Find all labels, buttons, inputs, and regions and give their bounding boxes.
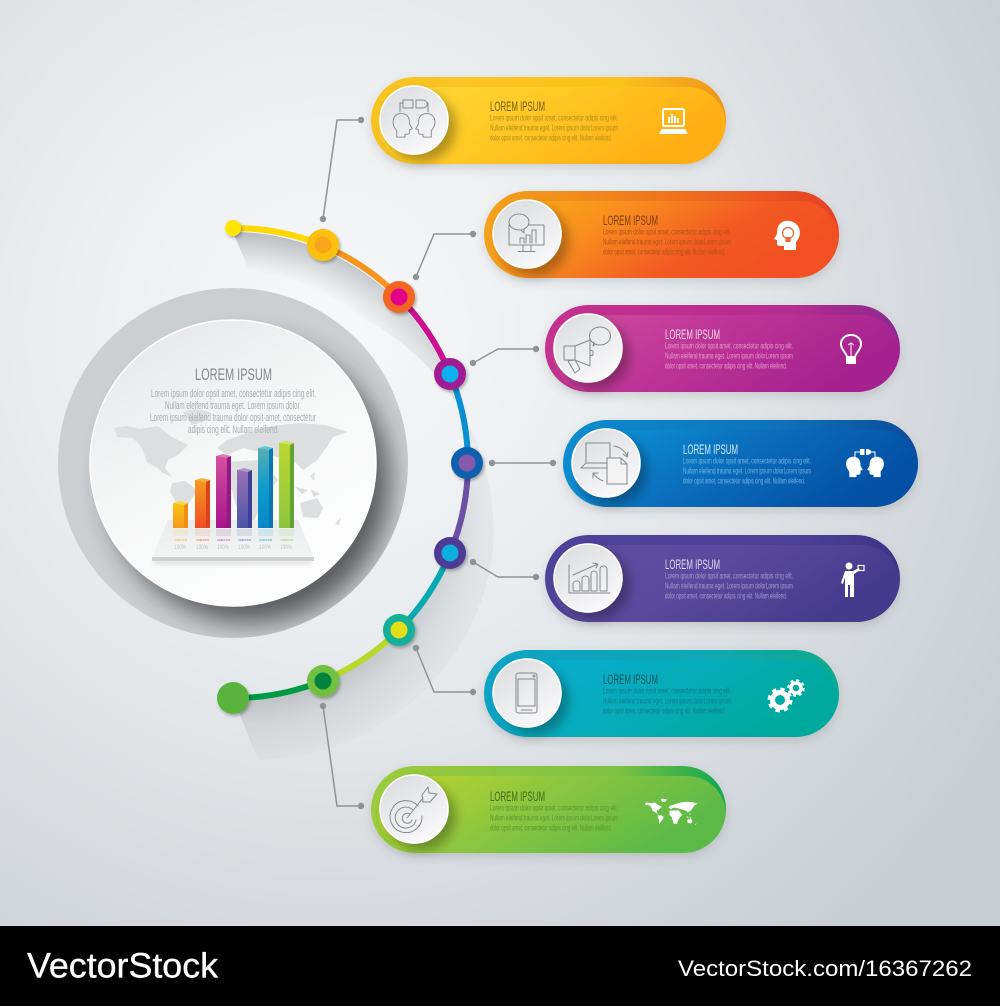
body text: dolor opsit amet, consectetur adipis cing elit. Nullam eleifend. [683, 476, 805, 486]
body text [490, 804, 618, 832]
bar labels: LOREM IPSUM [174, 538, 187, 542]
panel: blue card [563, 420, 918, 507]
panel: purple card [545, 535, 900, 622]
footer bar [0, 926, 1000, 1006]
body text: Lorem ipsum dolor opsit amet, consectetur adipis cing elit. [603, 686, 731, 696]
body text [665, 342, 793, 370]
heading: LOREM IPSUM [490, 788, 545, 804]
timeline arc [217, 220, 483, 714]
body text: Lorem ipsum dolor opsit amet, consectetur adipis cing elit. [603, 228, 731, 236]
body text: dolor opsit amet, consectetur adipis cing elit. Nullam eleifend. [603, 248, 725, 256]
icon: laptop and document [572, 429, 640, 497]
world map [114, 409, 348, 525]
arc cast shadow [234, 232, 494, 751]
bar labels: 100% [196, 545, 209, 551]
icon: two heads with plug [380, 86, 448, 154]
bar labels: LOREM IPSUM [259, 538, 272, 542]
body text: Lorem ipsum dolor opsit amet, consectetur adipis cing elit. [490, 804, 618, 812]
node 2 [383, 281, 415, 313]
bar 3 [216, 454, 231, 536]
bar labels: LOREM IPSUM [217, 538, 230, 542]
icon: world map [645, 799, 698, 825]
bar 6 [279, 441, 294, 536]
body text [683, 456, 811, 486]
bar labels [174, 538, 293, 551]
panel: orange card [484, 191, 839, 278]
body text: Nullam eleifend trauma eget. Lorem ipsum dolorLorem ipsum [490, 814, 618, 822]
body text [603, 228, 731, 256]
disc body text: Lorem ipsum dolor opsit amet, consectetur adipis cing elit. [151, 388, 316, 400]
body text: Nullam eleifend trauma eget. Lorem ipsum dolorLorem ipsum [683, 466, 811, 476]
body text: Nullam eleifend trauma eget. Lorem ipsum dolorLorem ipsum [490, 124, 618, 132]
white disc [90, 320, 376, 606]
body text: Nullam eleifend trauma eget. Lorem ipsum dolorLorem ipsum [603, 238, 731, 246]
panel: magenta card [545, 305, 900, 392]
icon: light bulb [841, 335, 861, 364]
heading: LOREM IPSUM [665, 556, 720, 572]
node 1 [307, 229, 339, 261]
disc body text: adipis cing elit. Nullam eleifend. [188, 424, 279, 436]
heading: LOREM IPSUM [603, 212, 658, 228]
disc body text [150, 388, 316, 436]
body text: dolor opsit amet, consectetur adipis cing elit. Nullam eleifend. [665, 362, 787, 370]
platform [152, 520, 314, 564]
icon: person with tablet [841, 562, 864, 597]
footer logo: VectorStock [27, 946, 219, 986]
body text: Lorem ipsum dolor opsit amet, consectetur adipis cing elit. [665, 572, 793, 580]
panel: yellow card [371, 77, 726, 164]
icon: gears [769, 680, 804, 711]
disc body text: Lorem ipsum eleifend trauma dolor opsit-amet, consectetur [150, 412, 316, 424]
start node [225, 220, 241, 236]
icon: smartphone [493, 659, 561, 727]
node 5 [434, 537, 466, 569]
heading: LOREM IPSUM [683, 441, 738, 457]
bar 2 [195, 478, 210, 536]
node 3 [434, 358, 466, 390]
icon: two heads white [846, 449, 884, 477]
heading: LOREM IPSUM [490, 98, 545, 114]
icon: target with arrow [380, 775, 448, 843]
connector lines [320, 117, 556, 809]
body text [665, 572, 793, 600]
panel: teal card [484, 650, 839, 737]
ring inner shadow [108, 341, 390, 623]
heading: LOREM IPSUM [603, 671, 658, 687]
end node [217, 682, 249, 714]
bar labels: 100% [280, 545, 293, 551]
node 4 [451, 447, 483, 479]
bar labels: LOREM IPSUM [196, 538, 209, 542]
footer url: VectorStock.com/16367262 [678, 956, 972, 981]
icon: head with bulb [774, 221, 800, 250]
bar 5 [258, 446, 273, 536]
bar labels: LOREM IPSUM [238, 538, 251, 542]
bar labels: 100% [217, 545, 230, 551]
body text [603, 686, 731, 716]
bar 1 [173, 501, 188, 536]
body text: dolor opsit amet, consectetur adipis cing elit. Nullam eleifend. [490, 134, 612, 142]
bar labels: 100% [259, 545, 272, 551]
disc body text: Nullam eleifend trauma eget. Lorem ipsum dolor. [165, 400, 301, 412]
node 7 [307, 665, 339, 697]
body text [490, 114, 618, 142]
icon: monitor with chart [493, 200, 561, 268]
icon: laptop [659, 109, 688, 134]
bar labels: 100% [238, 545, 251, 551]
body text: dolor opsit amet, consectetur adipis cing elit. Nullam eleifend. [603, 706, 725, 716]
bar labels: 100% [174, 545, 187, 551]
body text: Nullam eleifend trauma eget. Lorem ipsum dolorLorem ipsum [603, 696, 731, 706]
panel: green card [371, 766, 726, 853]
body text: Lorem ipsum dolor opsit amet, consectetur adipis cing elit. [683, 456, 811, 466]
body text: Lorem ipsum dolor opsit amet, consectetur adipis cing elit. [665, 342, 793, 350]
heading: LOREM IPSUM [665, 326, 720, 342]
outer grey ring [58, 288, 408, 638]
node 6 [383, 614, 415, 646]
body text: Nullam eleifend trauma eget. Lorem ipsum dolorLorem ipsum [665, 582, 793, 590]
bar labels: LOREM IPSUM [280, 538, 293, 542]
disc heading: LOREM IPSUM [195, 365, 272, 384]
body text: Nullam eleifend trauma eget. Lorem ipsum dolorLorem ipsum [665, 352, 793, 360]
icon: growth chart [554, 544, 622, 612]
bar chart [173, 441, 294, 551]
icon: megaphone [554, 314, 622, 382]
body text: dolor opsit amet, consectetur adipis cing elit. Nullam eleifend. [490, 824, 612, 832]
body text: dolor opsit amet, consectetur adipis cing elit. Nullam eleifend. [665, 592, 787, 600]
main circle graphic [58, 288, 408, 638]
body text: Lorem ipsum dolor opsit amet, consectetur adipis cing elit. [490, 114, 618, 122]
bar 4 [237, 468, 252, 536]
